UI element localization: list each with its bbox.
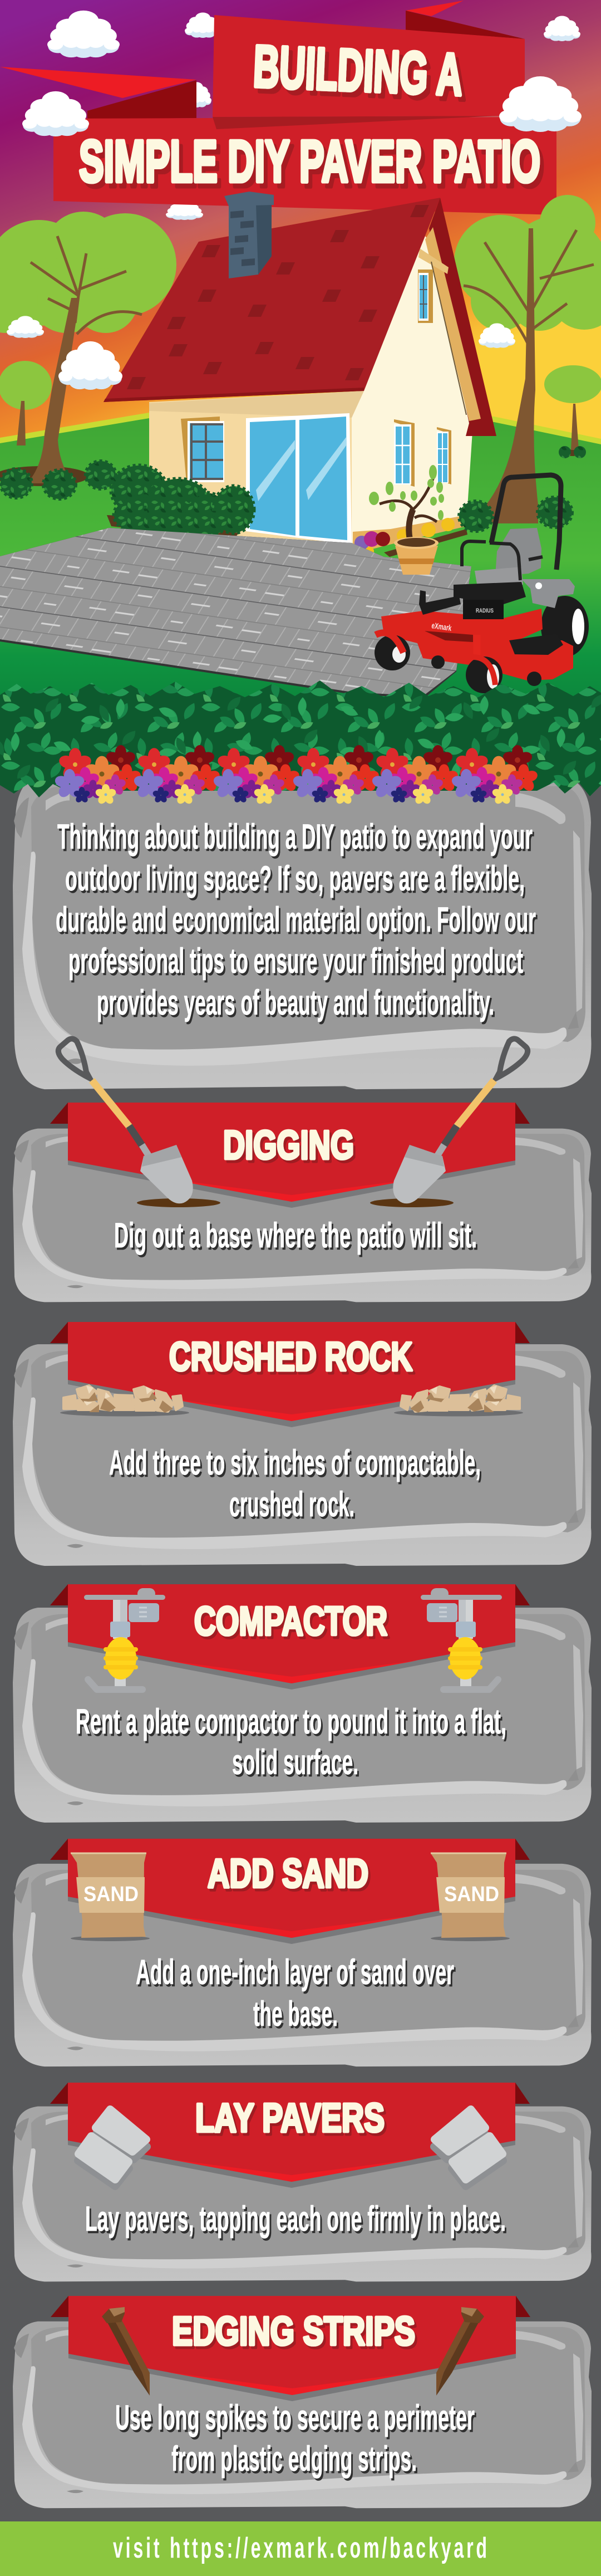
digging ribbon — [50, 1103, 530, 1208]
small shrubs at right tree — [559, 446, 586, 458]
footer bar — [0, 2521, 601, 2576]
sliding glass door — [246, 413, 352, 545]
edging text: from plastic edging strips. — [171, 2440, 417, 2479]
left window — [181, 417, 224, 482]
sand ribbon — [50, 1839, 530, 1944]
attic window — [418, 270, 433, 323]
title banner ribbon — [0, 1, 556, 215]
clouds behind the banner — [47, 11, 580, 220]
mower arm rests — [462, 541, 543, 580]
panel: crushed rock — [13, 1322, 592, 1566]
crushed rock text — [109, 1443, 481, 1524]
cloud in front of the tree and roof — [58, 341, 122, 390]
hero scene: sunset sky and yard — [0, 0, 601, 735]
sunset sky — [0, 0, 601, 457]
clouds in front of the trees — [7, 316, 515, 348]
panel: intro stone — [13, 777, 592, 1089]
pavers stone — [13, 2107, 592, 2281]
compactor text: solid surface. — [232, 1743, 358, 1782]
potted plant — [369, 465, 444, 575]
house front wall — [149, 391, 364, 545]
clouds in front of the banner — [22, 76, 582, 136]
right wall windows — [394, 419, 451, 487]
edging stone — [13, 2322, 592, 2508]
icon: left shovel — [58, 1039, 220, 1207]
paver patio — [0, 528, 471, 698]
icon: left pavers — [78, 2109, 147, 2186]
roof fascia and beam — [418, 198, 496, 436]
lawn — [0, 413, 601, 735]
sand stone — [13, 1864, 592, 2066]
crushed rock ribbon — [50, 1322, 530, 1427]
mower battery box: RADIUS — [476, 608, 494, 614]
main red roof with shingles — [104, 198, 440, 402]
mower rear wheel — [541, 596, 589, 657]
edging text — [115, 2398, 475, 2479]
mower battery box — [463, 600, 504, 619]
bush behind mower — [538, 497, 572, 527]
house gable wall — [352, 236, 473, 545]
crushed rock heading: CRUSHED ROCK — [169, 1335, 412, 1379]
sand text — [136, 1953, 454, 2034]
footer link text: visit https://exmark.com/backyard — [113, 2532, 487, 2564]
sand text: the base. — [253, 1995, 338, 2034]
small round bushes — [1, 461, 492, 531]
icon: left sand bag — [71, 1853, 150, 1941]
title line 1: BUILDING A — [252, 33, 464, 108]
pavers heading: LAY PAVERS — [195, 2096, 385, 2141]
mower front casters — [375, 633, 541, 693]
tree trunks and branches — [17, 228, 594, 523]
edging ribbon — [51, 2296, 530, 2401]
mower seat — [475, 528, 541, 587]
icon: right sand bag: SAND — [444, 1883, 499, 1906]
pavers ribbon — [50, 2083, 530, 2188]
small trees canopy — [0, 361, 601, 410]
panel: lay pavers — [13, 2083, 592, 2281]
right big tree canopy — [454, 195, 601, 331]
chimney — [224, 192, 274, 278]
icon: right pavers — [434, 2109, 503, 2186]
mower roll bar — [491, 475, 561, 570]
mulch beds — [0, 449, 585, 486]
compactor heading: COMPACTOR — [194, 1599, 387, 1644]
mower engine — [454, 582, 526, 619]
intro text — [56, 817, 536, 1022]
icon: left rock pile — [60, 1385, 189, 1417]
icon: right compactor — [421, 1588, 502, 1689]
icon: left spike — [102, 2307, 150, 2396]
crushed rock text: crushed rock. — [229, 1485, 354, 1524]
digging heading: DIGGING — [223, 1123, 354, 1168]
mower brand: eXmark — [431, 621, 452, 633]
left big tree canopy — [0, 212, 176, 333]
compactor stone — [13, 1608, 592, 1823]
flower border — [53, 745, 539, 805]
icon: right shovel — [370, 1039, 528, 1207]
hedge — [0, 680, 601, 797]
compactor text — [76, 1702, 506, 1782]
sand heading: ADD SAND — [208, 1852, 368, 1896]
compactor ribbon — [50, 1584, 530, 1689]
icon: left sand bag: SAND — [83, 1883, 139, 1906]
flower bed and wall base — [353, 515, 467, 557]
panel: add sand — [13, 1839, 592, 2066]
edging heading: EDGING STRIPS — [172, 2309, 415, 2354]
icon: right spike — [436, 2307, 484, 2396]
icon: right sand bag — [431, 1853, 510, 1941]
panel: digging — [13, 1039, 592, 1302]
icon: left compactor — [84, 1588, 165, 1689]
mower red deck — [381, 590, 573, 680]
digging stone — [13, 1129, 592, 1302]
icon: right rock pile — [394, 1385, 523, 1417]
panel: edging strips — [13, 2296, 592, 2508]
crushed rock stone — [13, 1344, 592, 1566]
zero-turn mower — [375, 475, 589, 693]
panel: compactor — [13, 1584, 592, 1823]
large bush by the door — [107, 466, 254, 540]
mower grey fender — [521, 579, 575, 608]
